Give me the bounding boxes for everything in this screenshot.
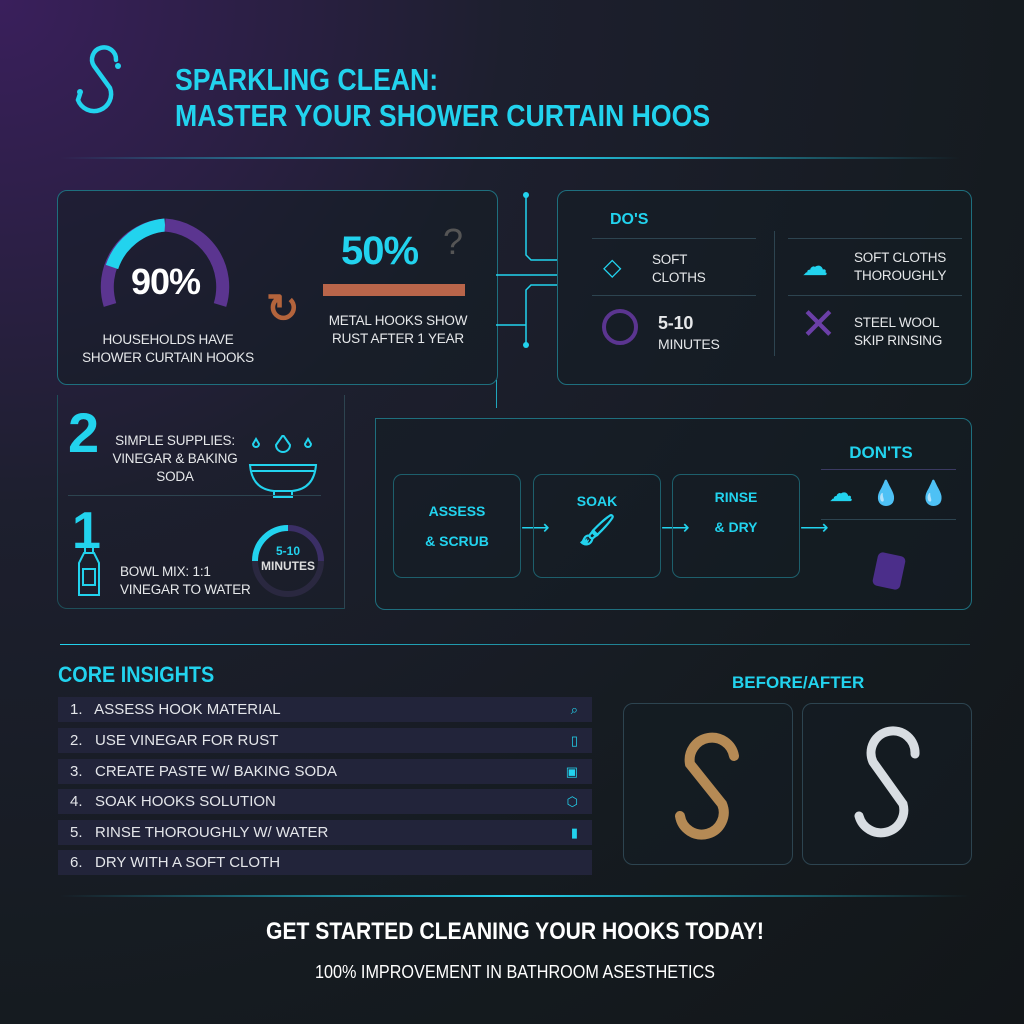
panel: do's: STEEL WOOL [854,315,939,330]
icon: rusty hook: ↻ [266,287,300,331]
footer: call to action: GET STARTED CLEANING YOUR HOOKS TODAY! [266,918,764,945]
panel: after hook [802,703,972,865]
chart: 5-10 min ring [252,525,324,597]
panel: stats: HOUSEHOLDS HAVE [102,332,234,347]
text: 2. USE VINEGAR FOR RUST [70,732,278,749]
panel: do's: MINUTES [658,336,720,352]
panel: supplies: SIMPLE SUPPLIES: [115,433,235,448]
panel: supplies: VINEGAR & BAKING [112,451,238,466]
step: rinse [672,474,800,578]
panel: do's: CLOTHS [652,270,706,285]
step: soak [533,474,661,578]
don'ts: DON'TS [849,443,913,462]
panel: supplies: SODA [156,469,194,484]
text: ⌕ [571,702,578,717]
panel: before hook [623,703,793,865]
panel: stats: 50% [341,229,418,273]
panel: process flow: ⟶ [800,517,829,539]
panel: stats: ? [443,221,463,262]
step: rinse: & DRY [714,519,758,535]
text: ▮ [571,825,578,840]
panel: supplies: 1 [72,502,101,560]
text: 5. RINSE THOROUGHLY W/ WATER [70,824,328,841]
title [175,62,710,133]
panel: stats: RUST AFTER 1 YEAR [332,331,464,346]
panel: do's: SKIP RINSING [854,333,942,348]
panel: stats: METAL HOOKS SHOW [329,313,467,328]
text: ▯ [571,733,578,748]
connector lines [496,192,557,408]
panel: stats [57,190,498,385]
step: soak: 🖌 [578,514,616,547]
step: rinse: RINSE [715,489,757,505]
don'ts [821,443,967,590]
title: MASTER YOUR SHOWER CURTAIN HOOS [175,98,710,133]
icon: hook logo [76,45,121,114]
panel: supplies: MINUTES [261,559,315,573]
panel: supplies: BOWL MIX: 1:1 [120,564,211,579]
text: 6. DRY WITH A SOFT CLOTH [70,854,280,871]
panel: supplies: 2 [68,401,99,464]
panel: do's: THOROUGHLY [854,268,946,283]
text: ⬡ [567,794,578,809]
icon: bottle [78,548,100,596]
text: 3. CREATE PASTE W/ BAKING SODA [70,763,337,780]
item: soft cloths thoroughly: ☁ [802,251,828,281]
list: insights [58,697,592,875]
step: assess: ASSESS [429,503,485,519]
icon: bowl [248,435,318,498]
step: assess: & SCRUB [425,533,489,549]
step: assess [393,474,521,578]
panel: process flow [375,418,972,610]
item: soft cloths: ◇ [603,254,621,281]
panel: process flow: ⟶ [521,517,550,539]
panel: supplies: VINEGAR TO WATER [120,582,251,597]
panel: supplies: 5-10 [276,544,300,558]
panel: do's: SOFT [652,252,687,267]
chart: 90% gauge [100,218,230,307]
item: steel wool: ✕ [800,300,837,349]
heading: core insights: CORE INSIGHTS [58,662,214,687]
step: soak: SOAK [577,493,617,509]
text: 4. SOAK HOOKS SOLUTION [70,793,276,810]
panel: do's: DO'S [610,211,648,228]
text: ▣ [566,764,578,779]
footer: subtitle: 100% IMPROVEMENT IN BATHROOM ASESTHETICS [315,962,715,982]
title: SPARKLING CLEAN: [175,62,438,97]
text: 1. ASSESS HOOK MATERIAL [70,701,281,718]
panel: process flow: ⟶ [661,517,690,539]
heading: before/after: BEFORE/AFTER [732,673,864,692]
don'ts: ☁💧💧 [829,480,967,507]
panel: supplies [57,395,345,609]
panel: stats: 90% [131,261,200,302]
panel: do's: SOFT CLOTHS [854,250,946,265]
panel: do's [557,190,972,385]
item: 5-10 minutes [602,309,638,345]
panel: stats: SHOWER CURTAIN HOOKS [82,350,254,365]
bar: rust [323,284,465,296]
panel: do's: 5-10 [658,313,693,333]
